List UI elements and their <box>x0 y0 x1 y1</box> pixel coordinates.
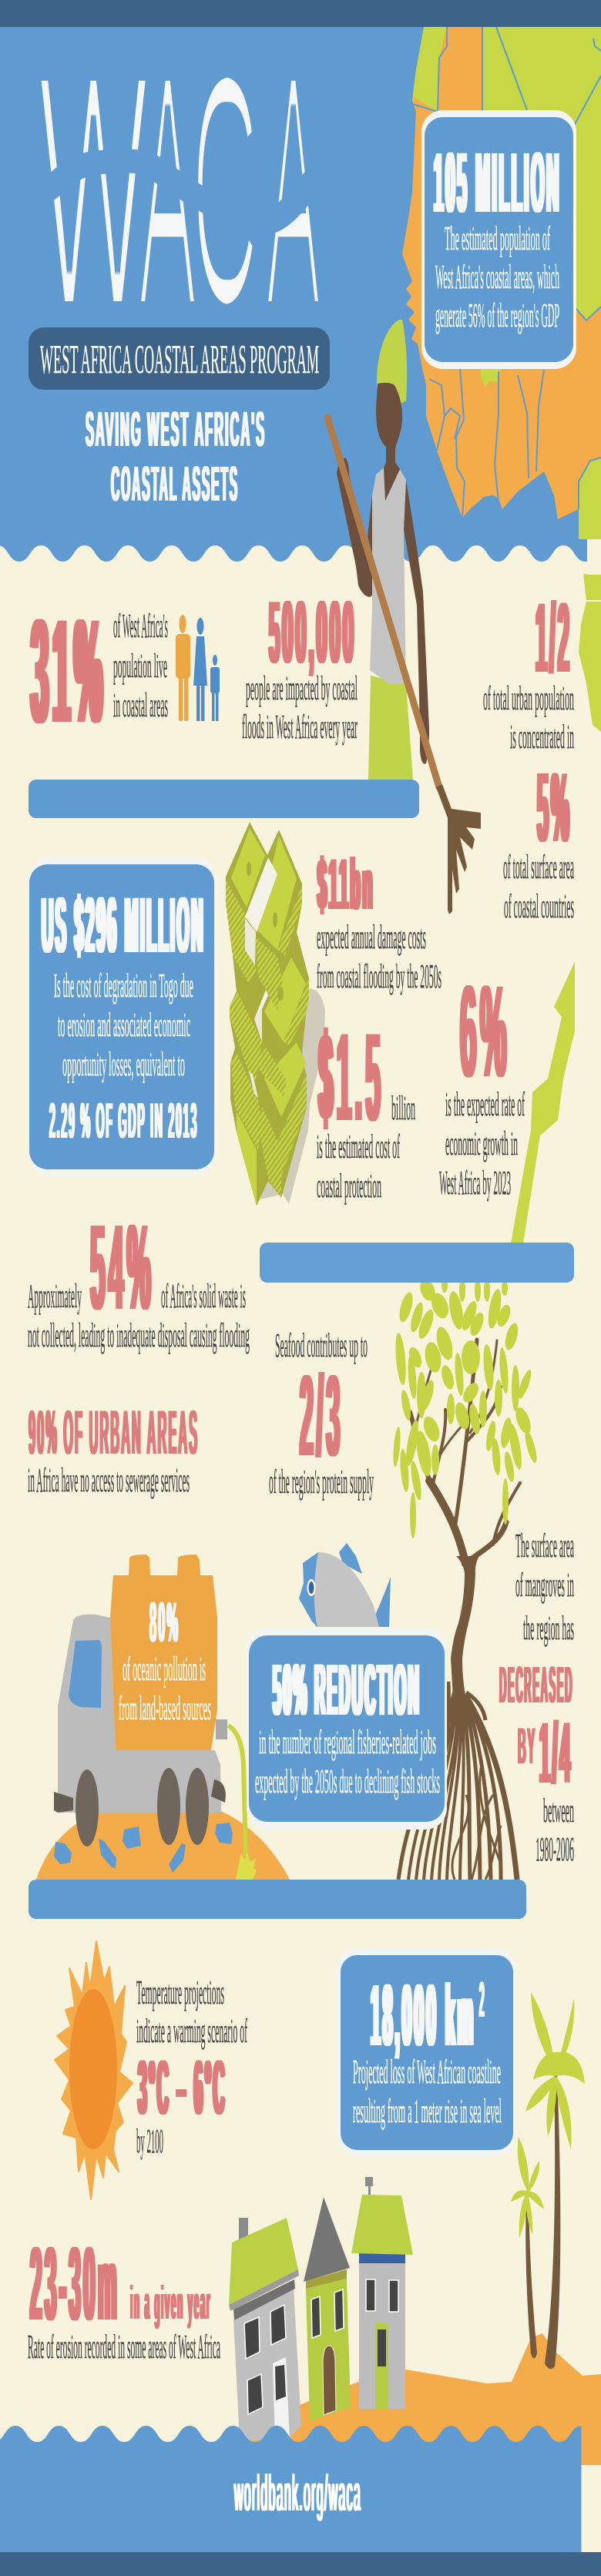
stat: mangroves <box>499 1527 574 1868</box>
icon: family of three <box>176 615 220 721</box>
stat: $11bn <box>317 844 442 995</box>
icon: stack of banknotes <box>226 822 325 1206</box>
stat: 54%: 54% <box>90 1200 154 1335</box>
arrow: growth <box>511 961 575 1243</box>
WACA logo: C <box>191 12 258 369</box>
bar 2 <box>260 1243 574 1283</box>
house: green <box>304 2197 351 2421</box>
text: of Africa's solid waste is <box>161 1277 246 1315</box>
illustration: man with rake <box>327 320 481 914</box>
text: in coastal areas <box>113 686 168 724</box>
stat: 6% <box>439 958 525 1202</box>
stat: temperature <box>136 1974 247 2160</box>
text: Temperature projections <box>136 1974 224 2011</box>
house: tall <box>351 2177 413 2409</box>
text: coastal protection <box>317 1167 381 1205</box>
callout: 105 million <box>421 110 576 369</box>
icon: sun <box>55 1941 133 2199</box>
text: of West Africa's <box>113 607 168 645</box>
stat: 90% of urban areas <box>28 1398 199 1499</box>
stat: 500,000 <box>242 584 358 746</box>
top water background <box>0 0 601 562</box>
text: 3°C – 6°C <box>138 2044 227 2130</box>
callout: 18,000 km2: 2 <box>479 1971 485 2028</box>
bottom band <box>0 2552 601 2576</box>
banner: program name <box>29 327 330 390</box>
callout: US $296 million <box>29 857 217 1176</box>
callout: 50% reduction <box>247 1628 447 1830</box>
subtitle <box>86 401 266 512</box>
bottom water <box>0 2426 581 2558</box>
text: opportunity losses, equivalent to <box>62 1045 185 1083</box>
text: population live <box>113 647 167 685</box>
WACA logo: W <box>39 12 149 370</box>
stat: mangroves: BY <box>518 1717 536 1774</box>
text: indicate a warming scenario of <box>136 2012 247 2050</box>
stat: 80% <box>119 1592 211 1727</box>
text: of oceanic pollution is <box>123 1650 206 1688</box>
illustration: houses <box>229 2177 413 2440</box>
island <box>211 2333 601 2465</box>
text: 2/3 <box>300 1351 343 1480</box>
bar 1 <box>29 780 419 818</box>
illustration: tanker truck <box>54 1555 257 1880</box>
stat: $1.5 billion <box>317 1008 415 1205</box>
illustration: tanker truck: 80% <box>149 1592 180 1654</box>
hill with waste <box>36 1799 290 1880</box>
stat: 2/3 <box>269 1327 374 1501</box>
text: from land-based sources <box>119 1689 211 1727</box>
text: to erosion and associated economic <box>58 1006 190 1044</box>
bar 3 <box>29 1880 526 1919</box>
text: in a given year <box>130 2277 211 2329</box>
stat: 54% <box>28 1200 250 1354</box>
text: $11bn <box>317 844 374 924</box>
illustration: mangrove tree <box>392 1277 539 1880</box>
text: billion <box>391 1089 415 1127</box>
map of West Africa <box>402 27 601 732</box>
stat: temperature: by 2100 <box>136 2122 163 2160</box>
illustration: fish <box>299 1543 391 1627</box>
stat: 54%: Approximately <box>28 1277 82 1315</box>
stat: 1/2 and 5% <box>483 583 574 925</box>
stat: 23-30m erosion <box>28 2225 220 2366</box>
top band <box>0 0 601 27</box>
house: grey <box>229 2218 301 2440</box>
text: 31% <box>31 589 106 753</box>
stat: 31% <box>31 589 168 753</box>
WACA logo: A <box>139 11 196 370</box>
text: 23-30m <box>30 2225 119 2342</box>
WACA logo: A <box>266 12 321 370</box>
callout: 18,000 km2 <box>337 1948 515 2156</box>
illustration: palm trees <box>511 1992 585 2369</box>
text: Is the cost of degradation in Togo due <box>54 967 193 1005</box>
WACA logo <box>31 11 321 370</box>
